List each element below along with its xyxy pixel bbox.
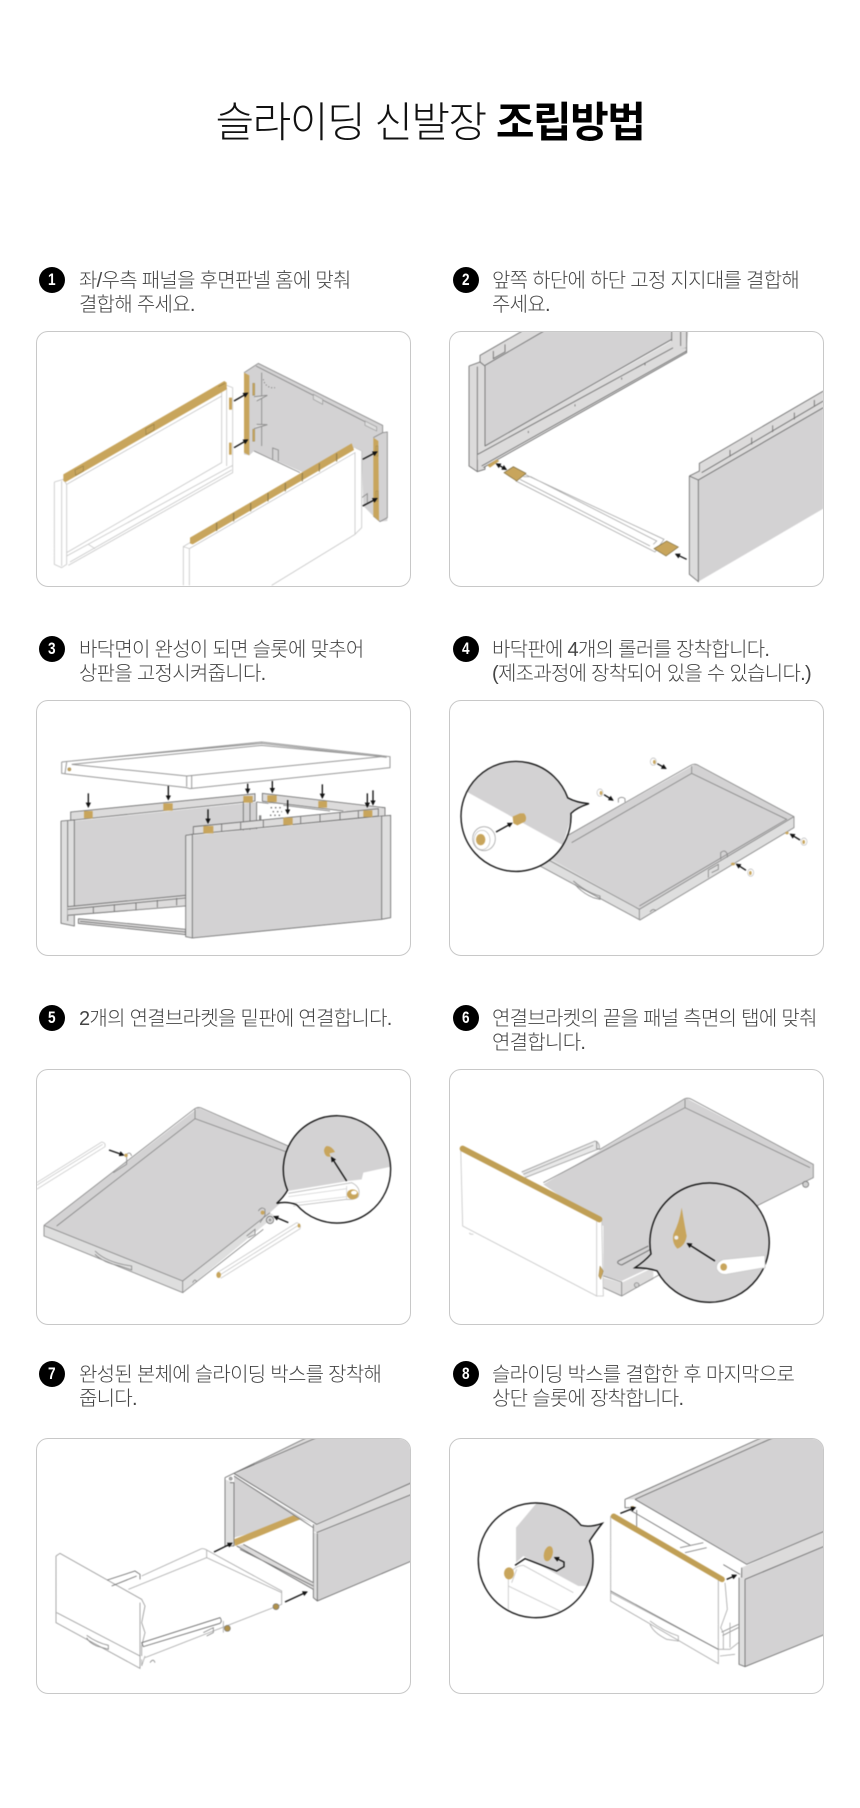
magnifier bubble <box>457 756 593 871</box>
gold tabs <box>84 795 372 833</box>
arrows <box>604 764 800 870</box>
tray <box>543 1098 813 1296</box>
step 7 number: 7 <box>48 1364 56 1383</box>
rod behind <box>522 1141 599 1178</box>
step 1 number: 1 <box>48 270 56 289</box>
step 7 text: 완성된 본체에 슬라이딩 박스를 장착해 <box>79 1364 381 1386</box>
left assembled panel <box>469 331 688 472</box>
panel: step 7 illustration <box>36 1438 411 1694</box>
step 3 number: 3 <box>48 639 56 658</box>
step 4 number: 4 <box>462 639 469 658</box>
step 2 text <box>492 270 799 316</box>
step 3 text: 상판을 고정시켜줍니다. <box>79 663 265 685</box>
arrows <box>234 393 377 506</box>
step 6 number <box>452 1005 478 1031</box>
arrows <box>497 464 687 559</box>
panel: step 5 illustration <box>36 1069 411 1325</box>
step 4 text: 바닥판에 4개의 롤러를 장착합니다. <box>492 639 769 661</box>
step 5 text: 2개의 연결브라켓을 밑판에 연결합니다. <box>79 1008 392 1030</box>
step 7 number <box>39 1361 65 1387</box>
step 2 text: 주세요. <box>492 294 550 316</box>
step 1 text: 좌/우측 패널을 후면판넬 홈에 맞춰 <box>79 270 351 292</box>
step 4 text: (제조과정에 장착되어 있을 수 있습니다.) <box>492 663 811 685</box>
arrows <box>109 1150 288 1223</box>
panel: step 1 illustration <box>36 331 411 587</box>
magnifier bubble <box>276 1114 392 1225</box>
arrows <box>620 1508 736 1579</box>
front white panel <box>183 443 362 585</box>
front panel <box>186 809 391 938</box>
magnifier bubble <box>635 1183 769 1302</box>
body <box>625 1438 825 1667</box>
step 1 text: 결합해 주세요. <box>79 294 195 316</box>
arrows <box>88 781 373 823</box>
right panel <box>689 391 823 582</box>
step 8 text: 상단 슬롯에 장착합니다. <box>492 1388 683 1410</box>
tray <box>44 1107 288 1293</box>
arrows <box>214 1543 307 1602</box>
step 7 text <box>79 1364 381 1410</box>
tray <box>540 764 794 920</box>
step 1 text <box>79 270 351 316</box>
step 6 text: 연결브라켓의 끝을 패널 측면의 탭에 맞춰 <box>492 1008 817 1030</box>
step 3 text: 바닥면이 완성이 되면 슬롯에 맞추어 <box>79 639 364 661</box>
step 5 number <box>39 1005 65 1031</box>
front panel with gold bar <box>461 1148 603 1296</box>
step 7 text: 줍니다. <box>79 1388 137 1410</box>
panel: step 6 illustration <box>449 1069 824 1325</box>
step 2 number <box>452 267 478 293</box>
step 3 number <box>39 636 65 662</box>
step 3 text <box>79 639 364 685</box>
step 4 number <box>452 636 478 662</box>
step 4 text <box>492 639 811 685</box>
left white frame panel <box>54 381 233 568</box>
back panel <box>244 363 387 522</box>
bottom bracket with gold ends <box>504 467 678 556</box>
panel: step 4 illustration <box>449 700 824 956</box>
drawer <box>610 1516 738 1664</box>
rods <box>37 1142 301 1278</box>
panel: step 2 illustration <box>449 331 824 587</box>
step 6 text: 연결합니다. <box>492 1032 585 1054</box>
step 8 number: 8 <box>462 1364 469 1383</box>
step 2 text: 앞쪽 하단에 하단 고정 지지대를 결합해 <box>492 270 799 292</box>
step 6 number: 6 <box>462 1008 469 1027</box>
step 6 text <box>492 1008 817 1054</box>
title: 슬라이딩 신발장 조립방법 <box>216 99 644 146</box>
top lid <box>62 742 390 789</box>
step 8 text: 슬라이딩 박스를 결합한 후 마지막으로 <box>492 1364 794 1386</box>
step 2 number: 2 <box>462 270 469 289</box>
magnifier bubble <box>478 1501 607 1618</box>
panel: step 3 illustration <box>36 700 411 956</box>
drawer <box>56 1549 282 1668</box>
step 5 number: 5 <box>48 1008 56 1027</box>
back walls and rails <box>61 793 385 935</box>
small rollers <box>597 758 807 876</box>
step 1 number <box>39 267 65 293</box>
panel: step 8 illustration <box>449 1438 824 1694</box>
body <box>225 1438 412 1601</box>
step 8 text <box>492 1364 794 1410</box>
step 8 number <box>452 1361 478 1387</box>
